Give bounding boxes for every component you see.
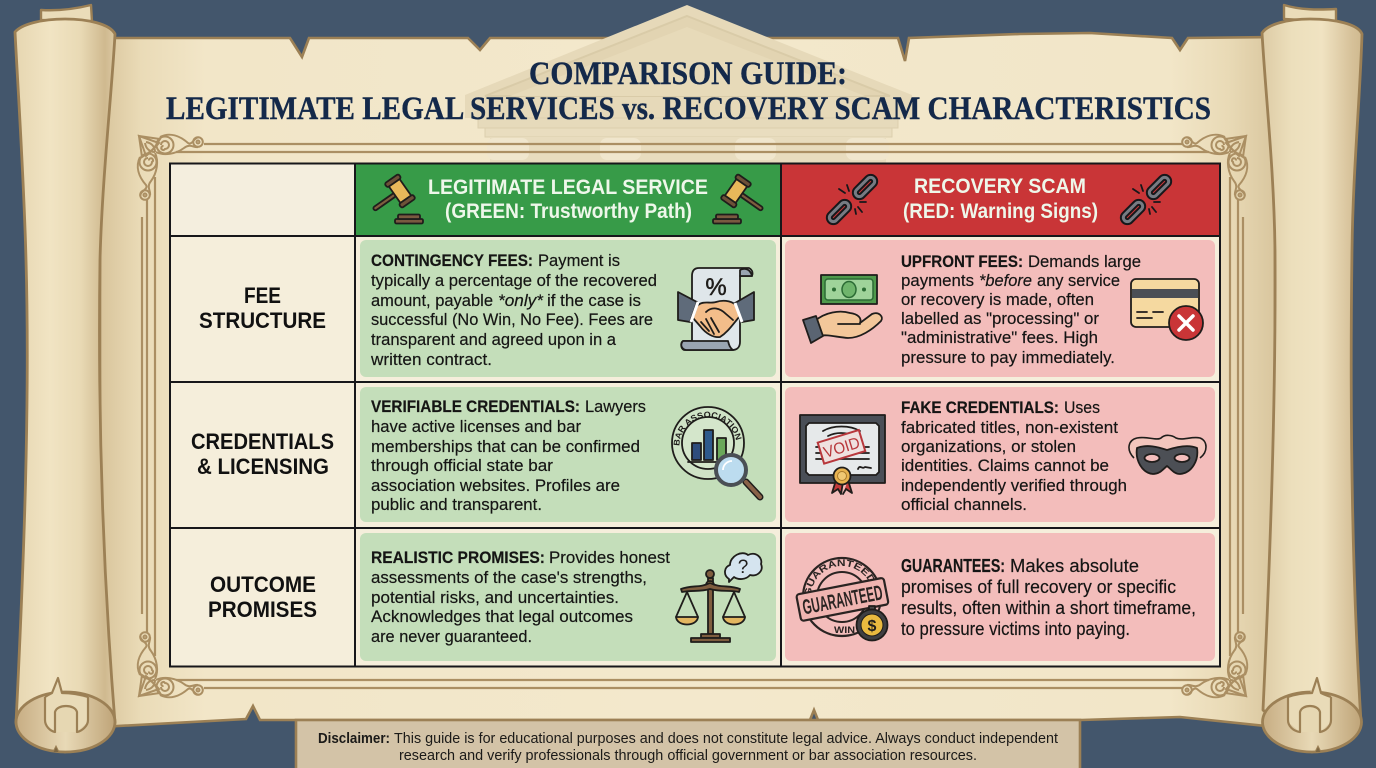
text: realistic promises: assessments of the case's strengths, (371, 568, 647, 587)
text: realistic promises: Provides honest (549, 548, 670, 567)
icon: scales with question bubble (676, 553, 762, 642)
text: contingency fees: Payment is (538, 251, 620, 270)
title (166, 56, 1211, 127)
text: fake credentials: official channels. (901, 495, 1027, 514)
icon: guaranteed stamp with stopwatch: WIN (834, 625, 855, 636)
row label: outcome promises: OUTCOME (210, 572, 316, 597)
text: guarantees: promises of full recovery or specific (901, 576, 1176, 597)
disclaimer text (318, 730, 1059, 764)
icon: guaranteed stamp with stopwatch (796, 556, 890, 642)
text: realistic promises: potential risks, and uncertainties. (371, 588, 619, 607)
text: realistic promises (371, 548, 670, 646)
icon: broken chain left (828, 176, 876, 223)
text: upfront fees: Demands large (1028, 252, 1141, 271)
disclaimer text: This guide is for educational purposes and does not constitute legal advice. Always conduct independent (394, 730, 1059, 747)
icon: cash over open hand (803, 275, 882, 343)
header: legitimate legal service (355, 163, 781, 236)
text: upfront fees: pressure to pay immediately. (901, 348, 1115, 367)
panel: fake credentials (785, 387, 1215, 522)
text: guarantees: to pressure victims into paying. (901, 618, 1130, 639)
header text: recovery scam (903, 175, 1098, 223)
text: realistic promises: Acknowledges that legal outcomes (371, 607, 633, 626)
text: verifiable credentials: VERIFIABLE CREDENTIALS: (371, 397, 580, 416)
icon: gavel right (713, 174, 771, 224)
temple watermark (465, 5, 912, 163)
text: verifiable credentials: association websites. Profiles are (371, 476, 620, 495)
row label: fee structure: STRUCTURE (199, 308, 326, 333)
text: verifiable credentials: memberships that can be confirmed (371, 437, 640, 456)
panel: upfront fees (785, 240, 1215, 377)
row label: outcome promises: PROMISES (208, 597, 317, 622)
text: upfront fees (901, 252, 1141, 367)
text: fake credentials: FAKE CREDENTIALS: (901, 398, 1059, 417)
text: fake credentials: fabricated titles, non-existent (901, 418, 1118, 437)
text: fake credentials: independently verified through (901, 476, 1127, 495)
panel: realistic promises (360, 533, 776, 661)
icon: bar association badge with magnifier (671, 406, 764, 500)
text: contingency fees (370, 251, 657, 369)
ornamental frame (138, 135, 1247, 697)
parchment sheet (100, 33, 1275, 727)
right scroll roll (1262, 5, 1362, 752)
text: upfront fees: "administrative" fees. High (901, 328, 1098, 347)
title: COMPARISON GUIDE: (529, 56, 847, 92)
left scroll roll (15, 5, 115, 752)
text: contingency fees: *only* (498, 291, 544, 310)
row label: fee structure (199, 283, 326, 333)
text: upfront fees: any service (1037, 271, 1120, 290)
text: verifiable credentials: through official state bar (371, 456, 553, 475)
text: upfront fees: UPFRONT FEES: (901, 252, 1023, 271)
icon: gavel left (365, 174, 423, 224)
text: contingency fees: CONTINGENCY FEES: (371, 251, 533, 270)
text: verifiable credentials: have active licenses and bar (371, 417, 581, 436)
text: guarantees: results, often within a short timeframe, (901, 597, 1196, 618)
text: realistic promises: are never guaranteed. (371, 627, 532, 646)
header text: legitimate: LEGITIMATE LEGAL SERVICE (428, 176, 708, 199)
text: verifiable credentials: public and transparent. (371, 495, 542, 514)
text: contingency fees: if the case is (547, 291, 641, 310)
icon: guaranteed stamp with stopwatch: GUARANTEED (801, 581, 885, 619)
text: realistic promises: REALISTIC PROMISES: (371, 548, 545, 567)
icon: guaranteed stamp with stopwatch: GUARANTEED (804, 559, 874, 592)
icon: bar association badge with magnifier: BAR ASSOCIATION (674, 412, 742, 446)
text: fake credentials: identities. Claims cannot be (901, 456, 1109, 475)
text: fake credentials: Uses (1064, 398, 1100, 417)
row label: credentials and licensing: & LICENSING (197, 454, 329, 479)
row label: credentials and licensing: CREDENTIALS (191, 429, 334, 454)
header text: recovery scam: RECOVERY SCAM (914, 175, 1086, 198)
text: contingency fees: typically a percentage of the recovered (371, 271, 657, 290)
header text: legitimate (428, 176, 708, 223)
text: verifiable credentials: Lawyers (585, 397, 646, 416)
icon: declined credit card (1131, 279, 1203, 340)
text: guarantees (901, 555, 1196, 639)
text: verifiable credentials (371, 397, 646, 514)
panel: verifiable credentials (360, 387, 776, 522)
text: contingency fees: transparent and agreed upon in a (371, 330, 617, 349)
text: guarantees: Makes absolute (1010, 555, 1139, 576)
text: upfront fees: *before (979, 271, 1032, 290)
row label: outcome promises (208, 572, 317, 622)
text: upfront fees: payments (901, 271, 974, 290)
icon: burglar mask (1129, 435, 1206, 474)
icon: void certificate: VOID (822, 435, 862, 462)
text: contingency fees: amount, payable (371, 291, 493, 310)
row label: credentials and licensing (191, 429, 334, 479)
icon: void certificate (800, 415, 885, 494)
header: recovery scam (781, 163, 1220, 236)
icon: broken chain right (1122, 176, 1170, 223)
text: upfront fees: or recovery is made, often (901, 290, 1094, 309)
text: contingency fees: written contract. (370, 350, 492, 369)
icon: handshake on contract: % (705, 274, 727, 301)
table grid lines (170, 163, 1220, 667)
header text: legitimate: (GREEN: Trustworthy Path) (445, 200, 692, 223)
icon: scales with question bubble: ? (738, 557, 748, 578)
disclaimer text: Disclaimer: (318, 730, 390, 747)
disclaimer (296, 720, 1080, 768)
header text: recovery scam: (RED: Warning Signs) (903, 200, 1098, 223)
title: LEGITIMATE LEGAL SERVICES vs. RECOVERY SCAM CHARACTERISTICS (166, 91, 1211, 127)
panel: contingency fees (360, 240, 776, 377)
text: upfront fees: labelled as "processing" or (901, 309, 1099, 328)
text: contingency fees: successful (No Win, No Fee). Fees are (371, 310, 653, 329)
text: fake credentials: organizations, or stolen (901, 437, 1076, 456)
text: fake credentials (901, 398, 1127, 514)
disclaimer text: research and verify professionals through official government or bar association resources. (399, 747, 977, 764)
comparison table (169, 162, 1221, 668)
icon: handshake on contract (678, 268, 754, 350)
icon: guaranteed stamp with stopwatch: $ (868, 618, 877, 635)
row label: fee structure: FEE (244, 283, 281, 308)
panel: guarantees (785, 533, 1215, 661)
text: guarantees: GUARANTEES: (901, 555, 1005, 576)
